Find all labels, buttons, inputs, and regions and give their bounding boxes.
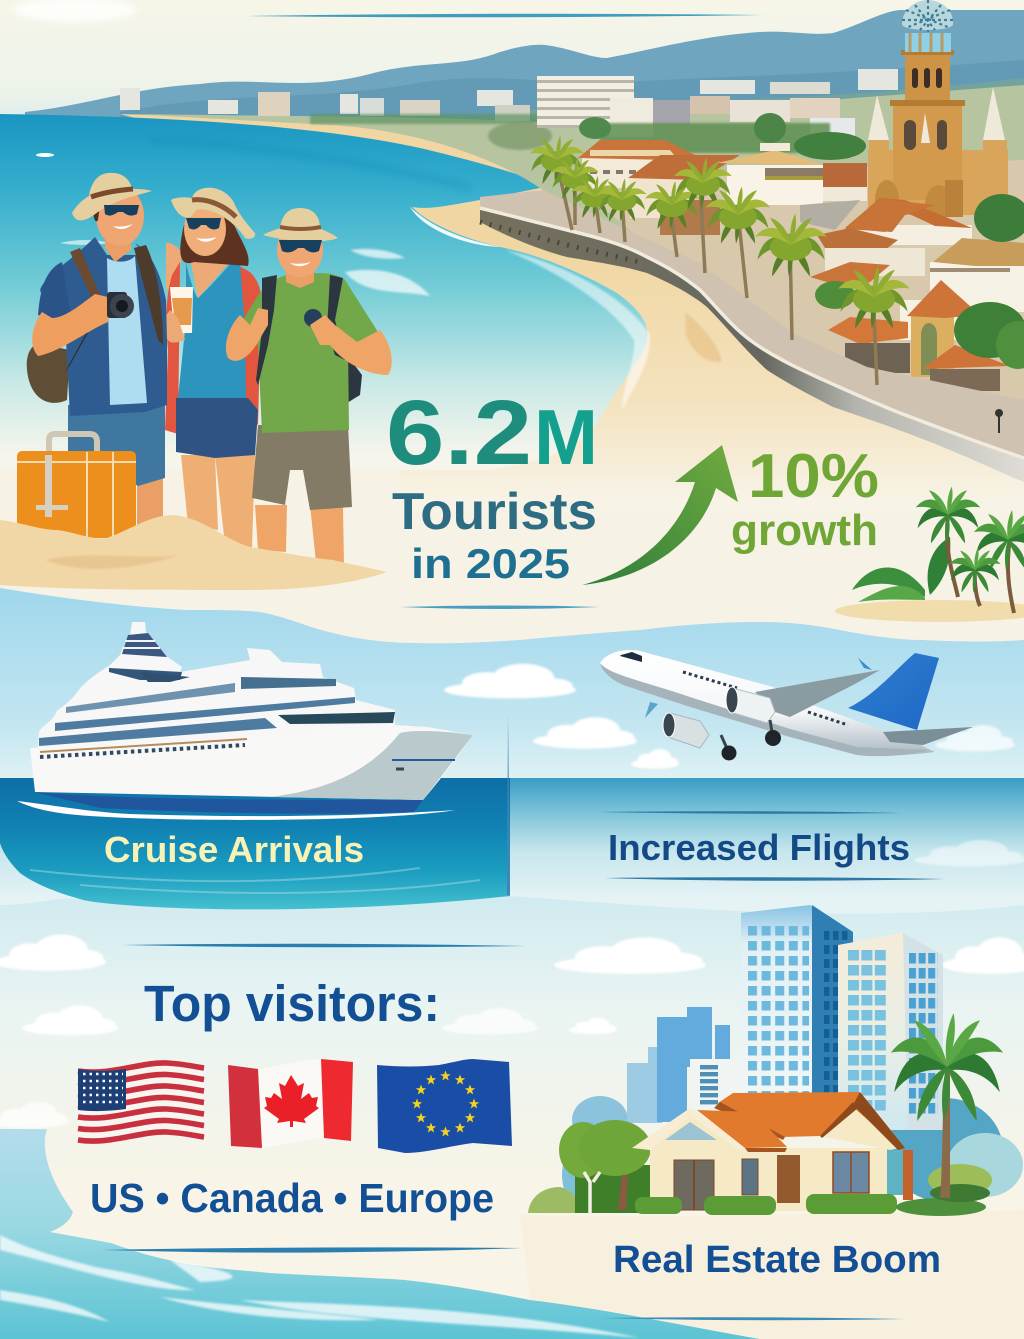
pale tower: [838, 933, 943, 1130]
label: visitor origins: US • Canada • Europe: [90, 1175, 494, 1221]
seaside promenade: [480, 190, 1024, 482]
tourist: man with camera: [27, 173, 167, 528]
ship wake: [17, 801, 456, 820]
plane engines: [730, 688, 775, 723]
sand beach: [120, 114, 1024, 510]
flag: United States: [78, 1061, 204, 1143]
house doors and windows: [674, 1160, 714, 1210]
sea: [0, 114, 650, 470]
decorative line under tourists: [400, 606, 600, 609]
plane tail: [848, 653, 939, 730]
clouds in middle sky: [444, 664, 1024, 866]
foreground palm: [891, 1013, 1003, 1198]
label: real estate boom: Real Estate Boom: [613, 1239, 941, 1281]
tall glass tower: [741, 905, 853, 1100]
green tree: [559, 1120, 651, 1215]
wet sand on beach: [685, 312, 722, 362]
beer glass: [170, 287, 193, 333]
sand mound: [0, 515, 387, 590]
sand shading: [45, 555, 180, 569]
palm trees on promenade: [530, 136, 910, 385]
small palm island: [835, 486, 1024, 622]
growth arrow: [582, 445, 738, 585]
flag: European Union: [377, 1059, 512, 1153]
landing gear: [721, 720, 773, 753]
ship waterline: [35, 792, 423, 814]
vertical divider: [507, 715, 510, 895]
label: increased flights: Increased Flights: [608, 827, 910, 868]
real estate illustration: [528, 905, 1023, 1216]
tourist: woman with drink: [163, 188, 261, 548]
church: [868, 0, 1008, 217]
hedges: [635, 1164, 992, 1216]
middle sea: [0, 778, 1024, 918]
main orange roof: [718, 1092, 905, 1150]
tourist group illustration: [0, 173, 392, 590]
man sun hat: [72, 173, 152, 220]
grey bow: [270, 731, 473, 800]
tourists label: Tourists: [392, 483, 597, 541]
heading: top visitors: Top visitors:: [144, 975, 440, 1032]
ground shrubs: [528, 1187, 580, 1213]
middle sky with cream panel edge: [0, 588, 1024, 790]
year label: in 2025: [411, 540, 570, 587]
10 percent figure: 10%: [748, 442, 879, 511]
headline stat: tourists: [386, 382, 598, 587]
tourist: man in green shirt: [226, 208, 392, 566]
cruise ship: [17, 622, 473, 820]
decorative line below real estate: [600, 1317, 905, 1320]
6.2 figure: 6.2: [386, 382, 532, 484]
plane fuselage: [600, 650, 935, 756]
sand beach lower right: [520, 1210, 1024, 1339]
city skyline and resort town: [120, 0, 1024, 405]
suburban house: [632, 1092, 913, 1211]
growth stat: [731, 442, 879, 555]
maple leaf: [264, 1075, 319, 1127]
plane wing: [755, 670, 880, 717]
walkway surface: [480, 190, 1024, 458]
wave foam: [0, 1235, 640, 1338]
label: cruise arrivals: Cruise Arrivals: [104, 829, 364, 870]
lower background: [0, 896, 1024, 1339]
M suffix: M: [534, 393, 598, 481]
front gable: [645, 1114, 740, 1148]
decorative lines around flights label: [600, 811, 945, 881]
arm holding camera: [32, 294, 112, 356]
decorative top line: [245, 14, 765, 17]
camera: [107, 292, 127, 318]
sea wall: [480, 208, 1024, 482]
airplane: [600, 650, 973, 760]
growth label: growth: [731, 506, 878, 555]
woman sun hat: [171, 188, 255, 239]
mountains: [25, 10, 1024, 150]
ship superstructure: [35, 622, 440, 780]
decorative line below visitors: [102, 1247, 522, 1253]
third sun hat: [263, 208, 338, 241]
lower sea: [0, 1129, 760, 1339]
background foliage: [562, 1096, 1023, 1213]
clouds in lower section: [0, 934, 1024, 1128]
flag: Canada: [228, 1059, 353, 1148]
decorative line above top visitors: [122, 944, 526, 947]
house walls: [650, 1148, 887, 1211]
colonial buildings: [578, 140, 867, 235]
suitcase: [17, 434, 136, 538]
distant skyline: [627, 1007, 742, 1123]
ship hull: [30, 727, 473, 800]
roofs and houses: [810, 198, 1024, 391]
